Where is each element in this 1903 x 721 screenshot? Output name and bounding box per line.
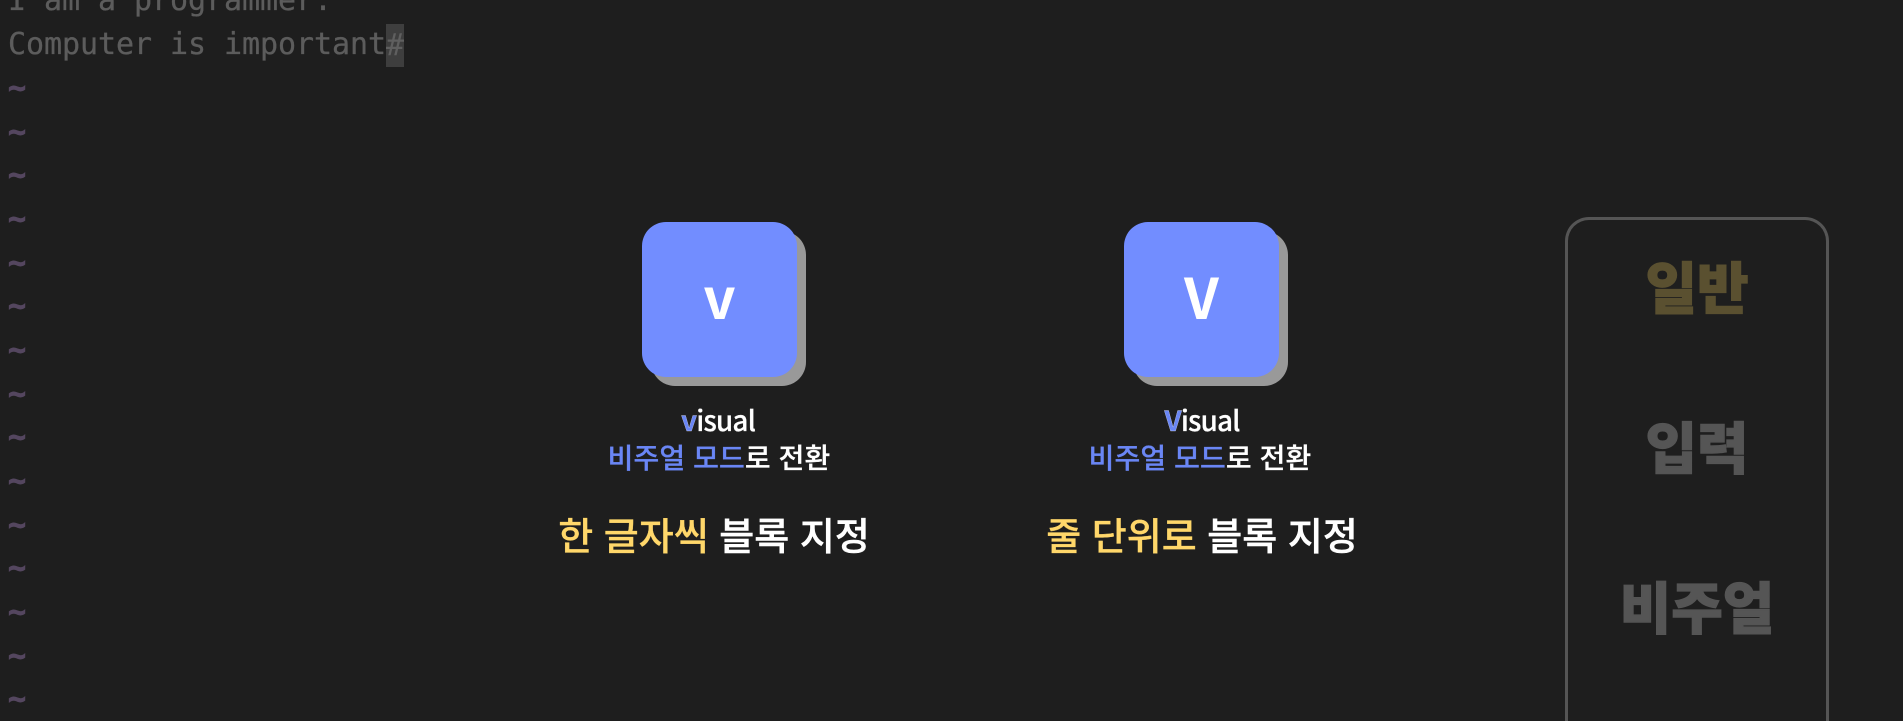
key card: uppercase V (1046, 222, 1358, 561)
empty line tildes (8, 71, 26, 716)
empty line tildes: ~ (8, 420, 26, 455)
key card: lowercase v (558, 222, 870, 561)
empty line tildes: ~ (8, 115, 26, 150)
empty line tildes: ~ (8, 464, 26, 499)
empty line tildes: ~ (8, 289, 26, 324)
empty line tildes: ~ (8, 508, 26, 543)
label: switch to visual mode: 비주얼 모드로 전환 (1089, 437, 1311, 477)
description: select by character: 한 글자씩 블록 지정 (558, 506, 870, 561)
icon: v key (642, 222, 797, 377)
empty line tildes: ~ (8, 682, 26, 716)
panel: vim modes (1565, 217, 1829, 721)
label: switch to visual mode: 비주얼 모드로 전환 (608, 437, 830, 477)
label: Visual: Visual (1164, 400, 1240, 440)
mode: insert: 입력 (1645, 405, 1749, 486)
mode: visual: 비주얼 (1620, 565, 1774, 646)
empty line tildes: ~ (8, 377, 26, 412)
empty line tildes: ~ (8, 158, 26, 193)
empty line tildes: ~ (8, 551, 26, 586)
empty line tildes: ~ (8, 71, 26, 106)
empty line tildes: ~ (8, 202, 26, 237)
empty line tildes: ~ (8, 333, 26, 368)
empty line tildes: ~ (8, 246, 26, 281)
description: select by line: 줄 단위로 블록 지정 (1046, 506, 1358, 561)
icon: V key: V (1184, 255, 1219, 336)
cursor block: # (386, 28, 404, 63)
label: visual: visual (681, 400, 755, 440)
mode: normal: 일반 (1645, 245, 1749, 326)
icon: V key (1124, 222, 1279, 377)
empty line tildes: ~ (8, 595, 26, 630)
empty line tildes: ~ (8, 639, 26, 674)
text line: Computer is important: Computer is important (8, 27, 386, 62)
icon: v key: v (703, 255, 736, 336)
vim terminal text (8, 0, 404, 716)
